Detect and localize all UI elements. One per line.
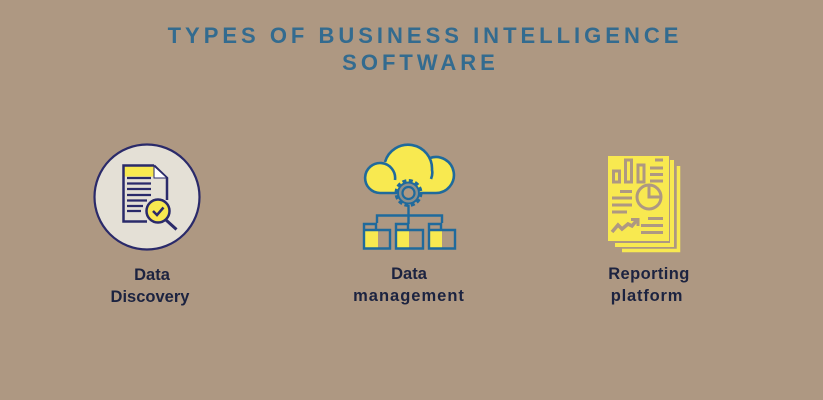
title: SOFTWARE xyxy=(342,50,499,75)
label: data discovery: Discovery xyxy=(111,288,189,306)
label: data discovery: Data xyxy=(134,266,170,284)
title xyxy=(168,23,682,75)
label: data management: management xyxy=(353,287,465,305)
label: data discovery xyxy=(111,266,190,306)
label: reporting platform xyxy=(608,265,690,305)
label: reporting platform: Reporting xyxy=(608,265,690,283)
label: data management: Data xyxy=(391,265,427,283)
title: TYPES OF BUSINESS INTELLIGENCE xyxy=(168,23,682,48)
label: data management xyxy=(353,265,465,305)
label: reporting platform: platform xyxy=(611,287,683,305)
